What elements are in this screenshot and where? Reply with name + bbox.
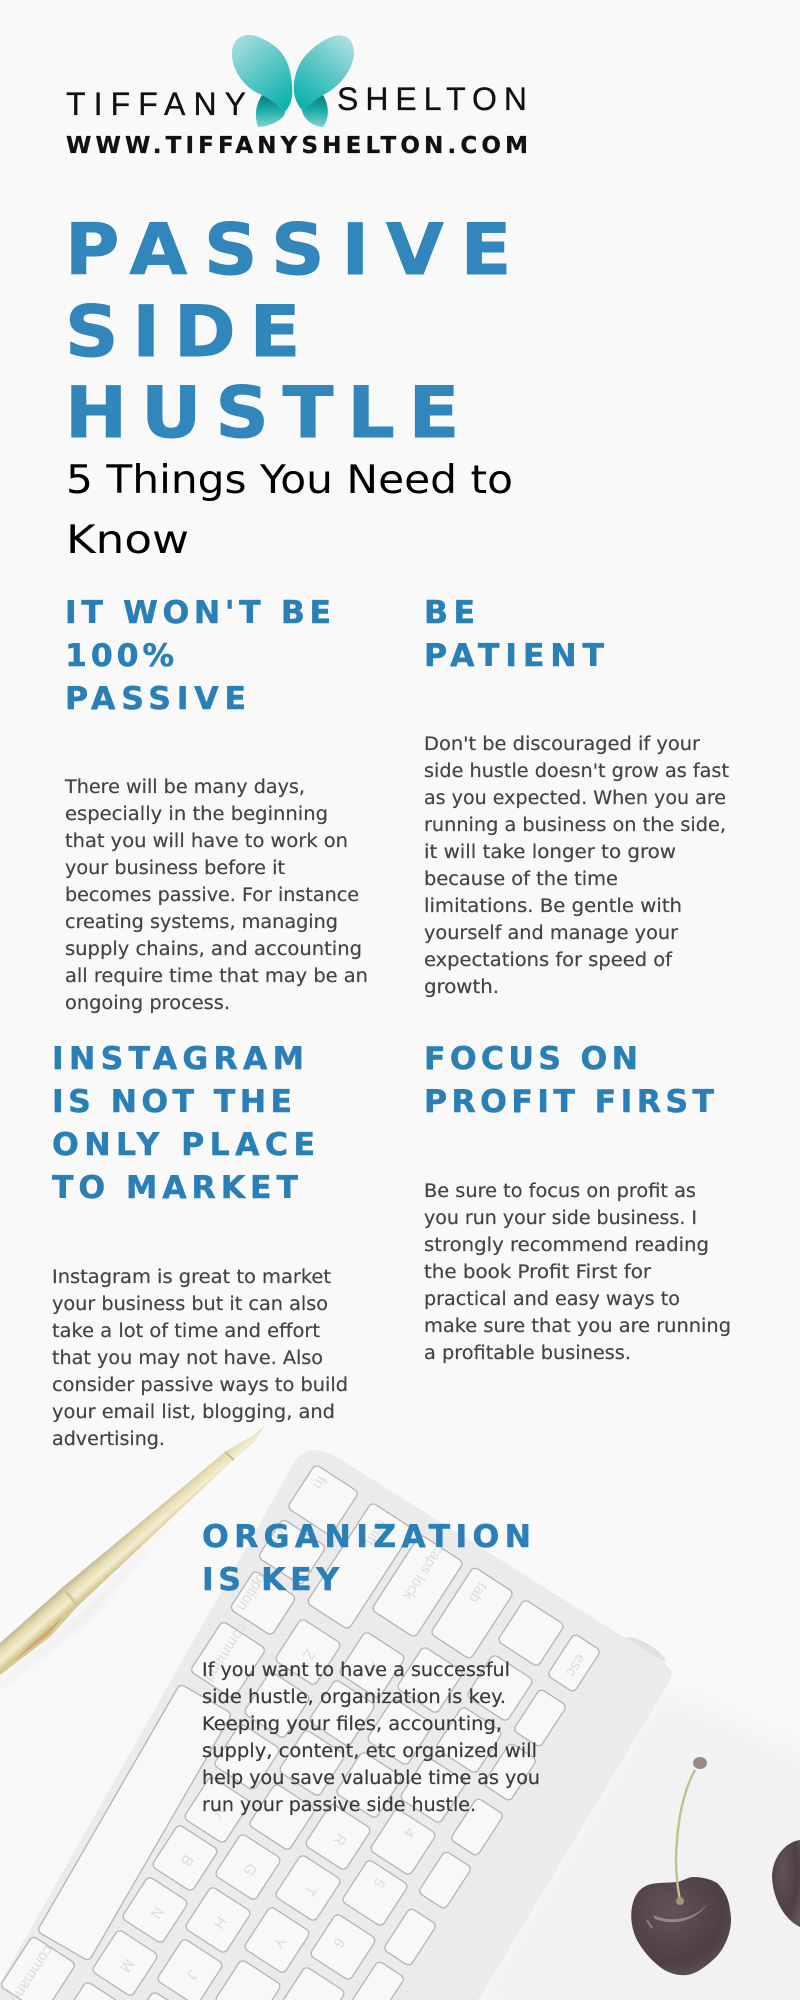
heading: PASSIVE xyxy=(65,681,246,717)
panel: focus on profit first xyxy=(424,1041,731,1364)
key legends: shift xyxy=(361,1516,390,1549)
text block: side hustle, organization is key. xyxy=(202,1687,506,1708)
background: white plate under cherries xyxy=(470,1690,800,2000)
key legends: R xyxy=(330,1830,350,1849)
logo: wordmark xyxy=(66,81,527,122)
text block xyxy=(202,1660,540,1816)
key legends: 5 xyxy=(369,1874,388,1891)
key legends: fn xyxy=(309,1473,330,1492)
text block: it will take longer to grow xyxy=(424,842,676,863)
title: HUSTLE xyxy=(65,373,459,454)
text block: that you will have to work on xyxy=(65,831,348,852)
key legends: tab xyxy=(465,1579,491,1606)
heading xyxy=(52,1041,315,1206)
text block: help you save valuable time as you xyxy=(202,1768,540,1789)
title: PASSIVE xyxy=(65,210,511,291)
text block: yourself and manage your xyxy=(424,923,678,944)
key legends: H xyxy=(210,1913,230,1932)
text block: growth. xyxy=(424,977,499,998)
text block xyxy=(424,1181,731,1364)
text block: run your passive side hustle. xyxy=(202,1795,476,1816)
keyboard space bar xyxy=(37,1684,232,1961)
cherry: main xyxy=(631,1877,731,1975)
keyboard xyxy=(0,1450,672,2000)
key legends: T xyxy=(300,1882,319,1899)
text block xyxy=(52,1267,348,1450)
text block: supply, content, etc organized will xyxy=(202,1741,537,1762)
heading: IS KEY xyxy=(202,1562,340,1598)
text block: limitations. Be gentle with xyxy=(424,896,682,917)
key legends: Z xyxy=(299,1646,318,1663)
text block: all require time that may be an xyxy=(65,966,368,987)
text block xyxy=(424,734,729,998)
text block: because of the time xyxy=(424,869,618,890)
background: white cup curve xyxy=(665,1305,800,1815)
keyboard body xyxy=(0,1450,672,2000)
text block: creating systems, managing xyxy=(65,912,338,933)
heading: TO MARKET xyxy=(52,1170,298,1206)
text block: Keeping your files, accounting, xyxy=(202,1714,502,1735)
text block: If you want to have a successful xyxy=(202,1660,510,1681)
key legends: command xyxy=(201,1620,251,1685)
panel: instagram is not the only place to market xyxy=(52,1041,348,1450)
heading: PROFIT FIRST xyxy=(424,1084,714,1120)
text block: running a business on the side, xyxy=(424,815,726,836)
subtitle: Know xyxy=(66,517,189,563)
text block: consider passive ways to build xyxy=(52,1375,348,1396)
cherry stem xyxy=(676,1770,695,1900)
heading: BE xyxy=(424,595,475,631)
text block: supply chains, and accounting xyxy=(65,939,362,960)
subtitle xyxy=(66,457,513,563)
cherry highlight xyxy=(653,1903,708,1922)
heading xyxy=(65,595,331,717)
text block xyxy=(64,777,368,1014)
text block: There will be many days, xyxy=(64,777,305,798)
heading: ONLY PLACE xyxy=(52,1127,315,1163)
title: SIDE xyxy=(65,292,300,373)
text block: Instagram is great to market xyxy=(52,1267,331,1288)
heading: ORGANIZATION xyxy=(202,1519,531,1555)
key legends: G xyxy=(239,1860,260,1879)
key legends: A xyxy=(364,1659,384,1676)
title xyxy=(65,210,511,454)
key legends: 6 xyxy=(329,1934,348,1951)
cherries xyxy=(631,1757,800,1975)
text block: that you may not have. Also xyxy=(52,1348,323,1369)
heading: FOCUS ON xyxy=(424,1041,638,1077)
text block: expectations for speed of xyxy=(424,950,672,971)
heading xyxy=(202,1519,531,1598)
text block: becomes passive. For instance xyxy=(65,885,359,906)
key legends: Y xyxy=(269,1934,289,1951)
key legends: N xyxy=(147,1903,167,1922)
logo: wordmark: TIFFANY xyxy=(66,86,246,122)
text block: make sure that you are running xyxy=(424,1316,731,1337)
text block: your business before it xyxy=(65,858,285,879)
key legends: J xyxy=(183,1967,201,1982)
key legends: ctrl xyxy=(263,1524,288,1550)
text block: ongoing process. xyxy=(65,993,230,1014)
icon: butterfly xyxy=(232,35,354,127)
text block: strongly recommend reading xyxy=(424,1235,709,1256)
text block: take a lot of time and effort xyxy=(52,1321,320,1342)
key legends: B xyxy=(177,1852,197,1869)
key legends: M xyxy=(116,1956,137,1975)
modifier keys xyxy=(0,1464,514,2000)
text block: Be sure to focus on profit as xyxy=(424,1181,696,1202)
key legends: esc xyxy=(562,1651,589,1680)
letter keys xyxy=(59,1599,565,2000)
text block: your email list, blogging, and xyxy=(52,1402,335,1423)
pen xyxy=(0,1425,265,1690)
panel: it won't be 100% passive xyxy=(64,595,368,1014)
text block: you run your side business. I xyxy=(424,1208,697,1229)
text block: the book Profit First for xyxy=(424,1262,651,1283)
subtitle: 5 Things You Need to xyxy=(66,457,513,503)
text block: advertising. xyxy=(52,1429,165,1450)
text block: Don't be discouraged if your xyxy=(424,734,700,755)
key legends: option xyxy=(234,1571,270,1614)
logo: Tiffany Shelton xyxy=(66,35,528,159)
key legends xyxy=(7,1473,589,2000)
key legends: V xyxy=(209,1804,229,1821)
key legends: caps lock xyxy=(399,1542,448,1604)
heading: IS NOT THE xyxy=(52,1084,292,1120)
cherry stem tip xyxy=(693,1757,707,1769)
panel: organization is key xyxy=(202,1519,540,1816)
keyboard cylinder end xyxy=(627,1637,665,1662)
logo: website: WWW.TIFFANYSHELTON.COM xyxy=(66,133,528,159)
text block: a profitable business. xyxy=(424,1343,631,1364)
text block: your business but it can also xyxy=(52,1294,328,1315)
heading: INSTAGRAM xyxy=(52,1041,304,1077)
logo: wordmark: SHELTON xyxy=(337,81,527,117)
text block: side hustle doesn't grow as fast xyxy=(424,761,729,782)
panel: be patient xyxy=(424,595,729,998)
heading xyxy=(424,1041,714,1120)
text block: practical and easy ways to xyxy=(424,1289,680,1310)
heading: 100% xyxy=(65,638,174,674)
cherry: right, cropped xyxy=(772,1840,800,1927)
text block: as you expected. When you are xyxy=(424,788,726,809)
text block: especially in the beginning xyxy=(65,804,328,825)
heading: IT WON'T BE xyxy=(65,595,331,631)
function keys xyxy=(351,1633,601,2000)
heading: PATIENT xyxy=(424,638,604,674)
heading xyxy=(424,595,604,674)
key legends: 4 xyxy=(399,1824,418,1841)
